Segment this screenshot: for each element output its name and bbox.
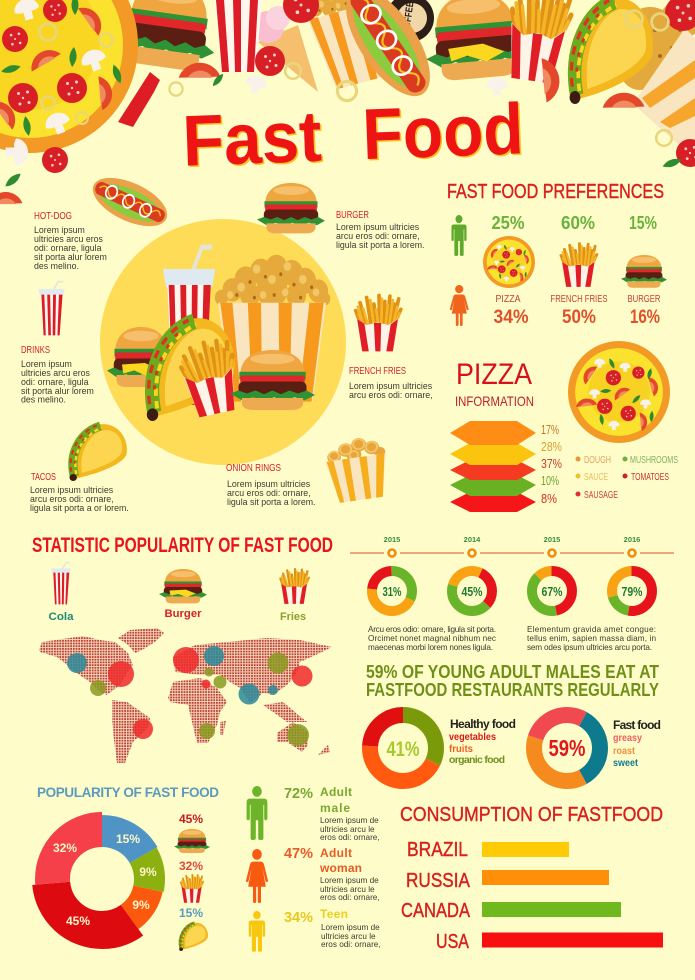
central food group [107, 247, 330, 421]
legend [576, 455, 678, 501]
adult male stat: ultricies arcu le [320, 825, 375, 834]
item: taco share: 15% [179, 906, 203, 920]
icon: pizza [483, 236, 535, 288]
central yellow circle [100, 219, 346, 465]
subheading: INFORMATION [455, 393, 534, 409]
yellow popcorn [620, 0, 695, 90]
title [181, 89, 526, 183]
paragraph left: maecenas morbi lorem nones ligula. [368, 643, 493, 652]
coffee cup [386, 0, 434, 42]
layer percentages [541, 422, 562, 506]
bar: Brazil [407, 839, 569, 861]
legend: DOUGH [584, 455, 611, 466]
drinks item: DRINKS [21, 344, 50, 356]
donut 79% [612, 571, 652, 611]
tacos item: TACOS [31, 471, 56, 483]
layer percentages: 37% [541, 456, 562, 471]
heading: STATISTIC POPULARITY OF FAST FOOD [32, 534, 333, 557]
item labels: PIZZA [496, 294, 521, 305]
donut: fast food: 59% [548, 735, 586, 761]
heading [366, 662, 659, 700]
adult male stat: Lorem ipsum de [320, 816, 379, 825]
fast food legend [613, 718, 661, 769]
legend: cola: Cola [48, 611, 74, 623]
adult woman stat: woman [319, 861, 362, 875]
legend: fries [280, 569, 309, 623]
bar: Brazil: BRAZIL [407, 839, 468, 861]
donut 45% [452, 571, 492, 611]
legend: fries: Fries [280, 611, 306, 623]
teen stat: eros odi: ornare, [321, 940, 381, 949]
burger item: ligula sit porta a lorem. [336, 240, 424, 250]
onion rings item [226, 435, 392, 507]
legend: SAUCE [584, 472, 608, 483]
panel: preferences [447, 181, 667, 328]
icon: fries [561, 244, 597, 287]
stacked layers [450, 421, 536, 512]
title: Fast [181, 97, 323, 182]
map bubbles [67, 646, 312, 746]
heading: 59% OF YOUNG ADULT MALES EAT AT [366, 662, 659, 682]
female percentages: 50% [562, 307, 596, 328]
teen stat: Lorem ipsum de [321, 923, 380, 932]
onion rings item: ligula sit porta a lorem. [227, 497, 316, 507]
drinks item [21, 282, 94, 404]
burger item: BURGER [336, 209, 369, 221]
teen stat: Teen [320, 907, 348, 921]
adult woman stat: 47% [284, 845, 313, 862]
french fries item: arcu eros odi: ornare, [349, 390, 433, 400]
adult male stat: male [320, 801, 350, 815]
timeline line [350, 552, 674, 554]
male percentages: 15% [629, 213, 657, 233]
hot-dog item [34, 168, 174, 271]
bar: Russia: RUSSIA [406, 870, 471, 892]
donut 31% [372, 571, 412, 611]
drinks item: des melino. [21, 394, 66, 404]
striped cup [214, 0, 262, 72]
panel: consumption of fastfood [400, 804, 663, 953]
adult woman stat: Adult [320, 846, 352, 860]
hot-dog item: Lorem ipsum [34, 225, 85, 235]
adult woman stat: Lorem ipsum de [320, 876, 379, 885]
fast food legend: roast [613, 745, 635, 757]
adult male stat: Adult [320, 785, 352, 799]
legend: burger: Burger [164, 608, 202, 620]
teen stat [249, 907, 381, 952]
top food banner [0, 0, 695, 221]
healthy food legend: organic food [449, 754, 505, 766]
paragraph right [527, 625, 656, 652]
heading: PIZZA [456, 358, 532, 391]
panel: popularity of fast food [37, 785, 381, 952]
female percentages [494, 307, 660, 328]
tacos item: arcu eros odi: ornare, [30, 494, 114, 504]
adult woman stat [246, 845, 380, 903]
burger item [257, 183, 424, 250]
teen stat: 34% [284, 909, 313, 926]
layer percentages: 8% [541, 491, 557, 506]
donut 31%: 31% [382, 584, 402, 599]
icon: female [450, 285, 469, 326]
paragraph left: Arcu eros odio: ornare, ligula sit porta. [368, 625, 496, 634]
layer percentages: 10% [541, 473, 559, 488]
donut: healthy food: 41% [386, 738, 420, 761]
adult male stat [247, 785, 380, 842]
paragraph right: Elementum gravida amet congue: [527, 625, 656, 634]
healthy food legend: Healthy food [450, 717, 516, 731]
adult woman stat: ultricies arcu le [320, 885, 375, 894]
item labels: BURGER [628, 294, 660, 305]
item: taco share [179, 906, 208, 951]
donut 45%: 45% [462, 584, 483, 599]
teen stat: ultricies arcu le [321, 932, 376, 941]
hot-dog item: odi: ornare, ligula [34, 243, 102, 253]
french fries item: FRENCH FRIES [349, 365, 406, 377]
burger top left [112, 0, 223, 74]
female percentages: 16% [630, 307, 660, 328]
timeline years: 2016 [624, 535, 640, 544]
donut labels: 45% [66, 914, 90, 928]
paragraph right: sem odes ipsum ultricies arcu porta. [527, 643, 652, 652]
item labels [496, 294, 660, 305]
ketchup bottle [118, 72, 160, 127]
adult male stat: 72% [284, 785, 313, 802]
healthy food legend: vegetables [449, 731, 496, 743]
bar: Russia [406, 870, 609, 892]
timeline years [384, 535, 640, 544]
timeline years: 2015 [384, 535, 400, 544]
timeline years: 2015 [544, 535, 560, 544]
burger with cheese [421, 0, 531, 82]
item: burger share [174, 812, 210, 853]
panel: young adult males [366, 662, 661, 781]
french fries item [349, 295, 433, 400]
large pizza [0, 0, 138, 153]
panel: timeline [350, 535, 674, 652]
legend: cola [48, 563, 74, 623]
male percentages: 25% [492, 213, 524, 233]
donut labels: 32% [53, 841, 77, 855]
adult male stat: eros odi: ornare, [320, 833, 380, 842]
item: burger share: 45% [179, 812, 203, 826]
title: Food [363, 91, 526, 177]
timeline markers [384, 545, 640, 561]
item: fries share: 32% [179, 859, 203, 873]
hot-dog [330, 0, 446, 109]
donut: healthy food [370, 715, 436, 781]
panel: pizza information [450, 341, 678, 512]
popcorn box [296, 0, 406, 92]
drinks item: Lorem ipsum [21, 359, 72, 369]
drinks item: odi: ornare, ligula [21, 377, 89, 387]
female percentages: 34% [494, 307, 529, 328]
ice cream cone [252, 6, 318, 92]
onion rings item: arcu eros odi: ornare, [227, 488, 311, 498]
bar: Canada: CANADA [401, 900, 471, 922]
donut labels: 9% [139, 865, 157, 879]
legend: burger [159, 569, 207, 620]
paragraph left [368, 625, 496, 652]
layer percentages: 28% [541, 439, 562, 454]
healthy food legend: fruits [449, 743, 473, 755]
male percentages [492, 213, 657, 233]
donut chart [51, 828, 153, 930]
timeline years: 2014 [464, 535, 481, 544]
title: Food [361, 89, 525, 175]
donut labels: 15% [116, 832, 140, 846]
panel: statistic popularity [32, 534, 333, 763]
donut labels [53, 832, 157, 928]
icon: male [451, 215, 467, 256]
burger item: arcu eros odi: ornare, [336, 231, 420, 241]
legend: SAUSAGE [584, 490, 618, 501]
healthy food legend [449, 717, 516, 766]
bar: Canada [401, 900, 621, 922]
adult woman stat: eros odi: ornare, [320, 893, 380, 902]
donut labels: 9% [132, 898, 150, 912]
paragraph right: tellus enim, sapien massa diam, in [527, 634, 656, 643]
panel: food types [21, 168, 433, 513]
burger item: Lorem ipsum ultricies [336, 222, 420, 232]
donut: fast food [534, 715, 600, 781]
dotted world map [39, 628, 332, 763]
donut 67% [532, 571, 572, 611]
fries [503, 0, 574, 85]
donut 67%: 67% [542, 584, 563, 599]
fast food legend: sweet [613, 757, 638, 769]
hot-dog item: HOT-DOG [34, 210, 72, 222]
french fries item: Lorem ipsum ultricies [349, 381, 433, 391]
tacos item: Lorem ipsum ultricies [30, 485, 114, 495]
pizza illustration [568, 341, 670, 443]
tacos item [30, 424, 129, 513]
hot-dog item: des melino. [34, 261, 79, 271]
drinks item: ultricies arcu eros [21, 368, 91, 378]
onion rings item: Lorem ipsum ultricies [227, 479, 311, 489]
paragraph left: Orcimet nonet magnal nibhum nec [368, 634, 496, 643]
fast food legend: greasy [613, 732, 642, 744]
taco [570, 0, 653, 104]
drinks item: sit porta alur lorem [21, 386, 94, 396]
bar: USA [436, 931, 663, 953]
heading: POPULARITY OF FAST FOOD [37, 785, 219, 800]
title: Fast [183, 98, 325, 183]
item labels: FRENCH FRIES [550, 294, 608, 305]
scattered toppings [0, 0, 695, 221]
item: fries share [179, 859, 203, 903]
layer percentages: 17% [541, 422, 559, 437]
fast food legend: Fast food [613, 718, 661, 732]
hot-dog item: sit porta alur lorem [34, 252, 107, 262]
bar: USA: USA [436, 931, 470, 953]
male percentages: 60% [561, 213, 595, 233]
striped box [633, 28, 695, 146]
donut 79%: 79% [622, 584, 643, 599]
hot-dog item: ultricies arcu eros [34, 234, 104, 244]
legend: TOMATOES [631, 472, 669, 483]
icon: burger [621, 255, 667, 288]
onion rings item: ONION RINGS [226, 462, 281, 474]
tacos item: ligula sit porta a or lorem. [30, 503, 129, 513]
heading: CONSUMPTION OF FASTFOOD [400, 804, 663, 826]
